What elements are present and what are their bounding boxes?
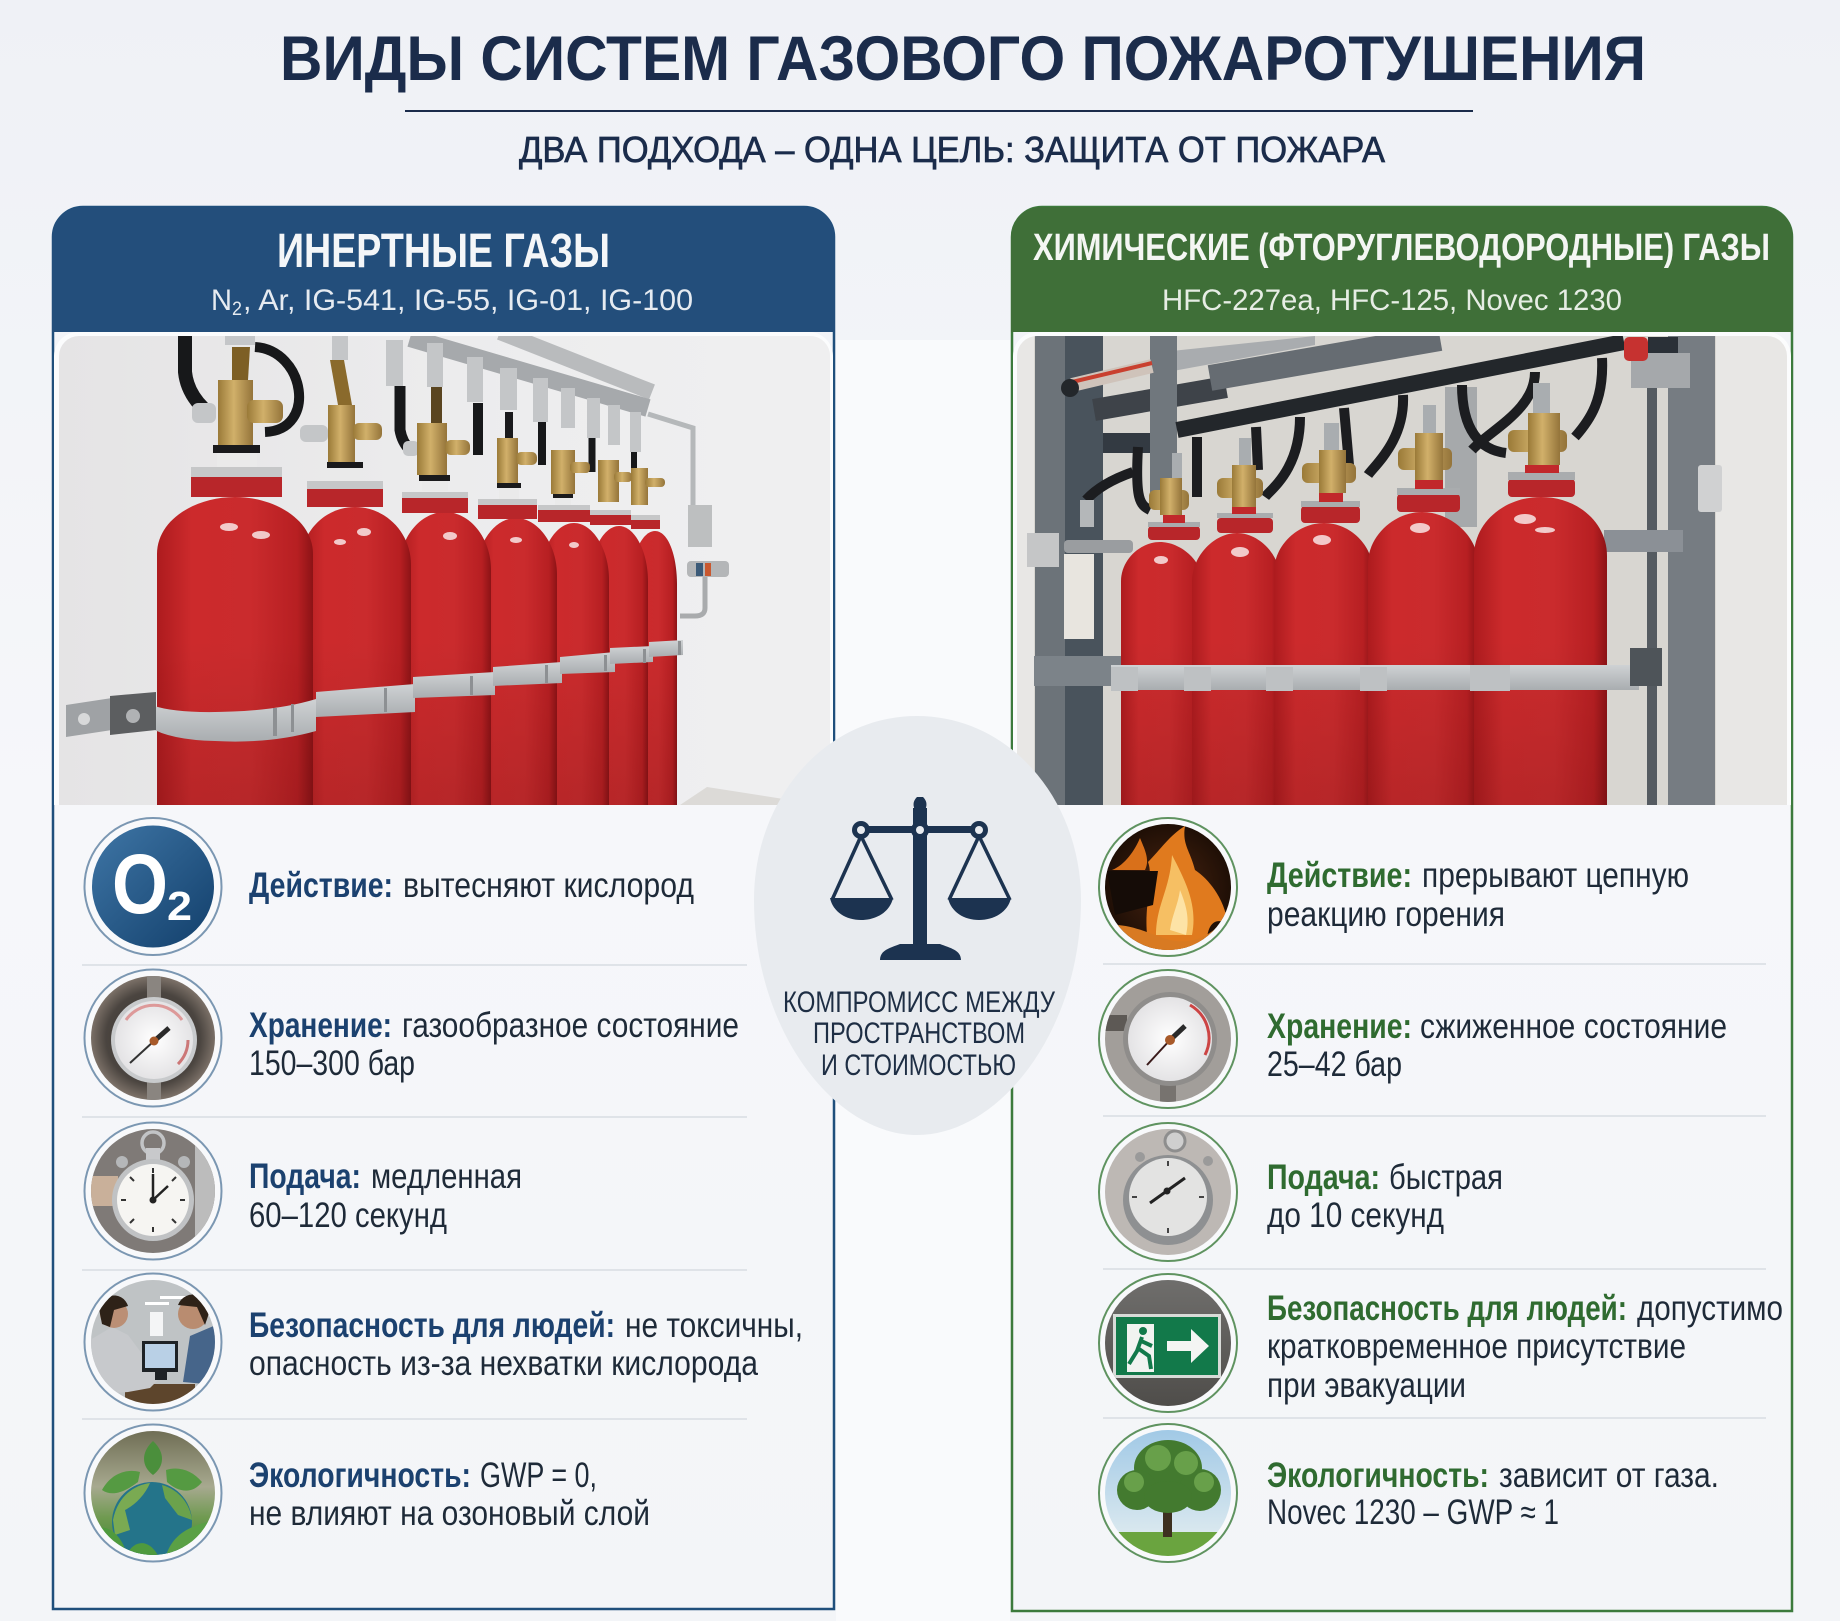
text: storage, chemical: сжиженное состояние: [1420, 1007, 1727, 1046]
heading: inert gases: ИНЕРТНЫЕ ГАЗЫ: [277, 225, 610, 278]
cylinders: [1121, 465, 1607, 805]
icon: O2: O: [112, 837, 168, 931]
text: ecology, inert: Экологичность:: [249, 1456, 471, 1495]
icon: O2: [84, 818, 222, 955]
text: safety, chemical: [1267, 1289, 1783, 1405]
text: safety, inert: Безопасность для людей:: [249, 1306, 615, 1345]
text: ecology, chemical: [1267, 1456, 1719, 1532]
clamp bands: [149, 640, 683, 742]
text: delivery, chemical: Подача:: [1267, 1158, 1380, 1197]
text: storage, chemical: Хранение:: [1267, 1007, 1412, 1046]
icon: stopwatch, inert: [84, 1122, 222, 1260]
text: delivery, chemical: быстрая: [1389, 1158, 1503, 1197]
text: storage, inert: Хранение:: [249, 1006, 392, 1045]
text: delivery, inert: 60–120 секунд: [249, 1196, 447, 1235]
icon: O2: 2: [167, 883, 192, 929]
text: storage, inert: [249, 1006, 739, 1083]
brass valves: [1149, 413, 1567, 515]
text: ecology, chemical: Экологичность:: [1267, 1456, 1489, 1495]
text: delivery, inert: [249, 1157, 522, 1235]
steel frame: [1035, 336, 1065, 805]
text: storage, inert: 150–300 бар: [249, 1044, 415, 1083]
text: action, chemical: прерывают цепную: [1422, 856, 1689, 895]
text: storage, chemical: 25–42 бар: [1267, 1045, 1402, 1084]
text: ecology, inert: не влияют на озоновый слой: [249, 1494, 650, 1533]
text: safety, chemical: при эвакуации: [1267, 1366, 1466, 1405]
icon: pressure gauge, chemical: [1099, 970, 1237, 1108]
text: safety, inert: [249, 1306, 803, 1383]
row separators: [82, 963, 1766, 1420]
text: ecology, inert: GWP = 0,: [480, 1456, 597, 1495]
text: safety, chemical: допустимо: [1637, 1289, 1783, 1328]
text: action, inert: Действие:: [249, 866, 393, 905]
icon: exit sign: [1099, 1274, 1237, 1412]
icon: earth with leaves: [84, 1424, 222, 1562]
text: safety, chemical: Безопасность для людей:: [1267, 1289, 1627, 1328]
callout text: [783, 986, 1056, 1082]
pipes and beam: [1094, 387, 1226, 410]
text: ecology, chemical: зависит от газа.: [1499, 1456, 1719, 1495]
text: ecology, chemical: Novec 1230 – GWP ≈ 1: [1267, 1493, 1559, 1532]
icon: people at console: [84, 1274, 222, 1410]
panel: inert gases: [52, 207, 835, 1609]
text: safety, chemical: кратковременное присутствие: [1267, 1327, 1686, 1366]
clamp band: [1111, 665, 1639, 690]
text: delivery, inert: медленная: [371, 1157, 522, 1196]
panel header: chemical gases: [1011, 207, 1793, 332]
icon: tree: [1099, 1424, 1237, 1562]
silver stems: [192, 336, 641, 456]
callout text: И СТОИМОСТЬЮ: [821, 1049, 1016, 1082]
gas list: inert gases: N: [211, 284, 232, 317]
text: storage, inert: газообразное состояние: [402, 1006, 739, 1045]
icon: stopwatch, chemical: [1099, 1123, 1237, 1261]
gas list: inert gases: 2: [232, 299, 242, 320]
gas list: inert gases: , Ar, IG-541, IG-55, IG-01, IG-100: [243, 284, 693, 317]
cylinders: [157, 467, 677, 805]
wall bracket: [66, 698, 112, 737]
panel: chemical gases: [1011, 207, 1793, 1611]
text: ecology, inert: [249, 1456, 650, 1533]
text: delivery, chemical: до 10 секунд: [1267, 1196, 1444, 1235]
icon: flame: [1099, 818, 1237, 956]
text: safety, inert: опасность из-за нехватки кислорода: [249, 1344, 758, 1383]
brass valves: [218, 347, 665, 505]
text: action, inert: вытесняют кислород: [403, 866, 694, 905]
callout text: КОМПРОМИСС МЕЖДУ: [783, 986, 1056, 1019]
text: action, chemical: реакцию горения: [1267, 895, 1505, 934]
text: delivery, inert: Подача:: [249, 1157, 361, 1196]
text: storage, chemical: [1267, 1007, 1727, 1084]
icon: pressure gauge, inert: [84, 970, 222, 1106]
pipes: [500, 332, 652, 392]
photo: inert gas cylinders: [59, 332, 830, 805]
text: action, chemical: [1267, 856, 1689, 934]
photo: chemical gas cylinders: [1017, 336, 1787, 805]
icon: balance scale: [830, 797, 1011, 960]
center callout: compromise: [754, 716, 1081, 1135]
gas list: chemical gases: HFC-227ea, HFC-125, Novec 1230: [1162, 284, 1622, 317]
subtitle: ДВА ПОДХОДА – ОДНА ЦЕЛЬ: ЗАЩИТА ОТ ПОЖАРА: [519, 129, 1385, 170]
text: action, inert: [249, 866, 694, 905]
text: delivery, chemical: [1267, 1158, 1503, 1235]
hoses: [1086, 358, 1602, 510]
callout text: ПРОСТРАНСТВОМ: [813, 1017, 1025, 1050]
hoses: [185, 336, 634, 480]
title: ВИДЫ СИСТЕМ ГАЗОВОГО ПОЖАРОТУШЕНИЯ: [280, 24, 1646, 94]
text: safety, inert: не токсичны,: [625, 1306, 803, 1345]
text: action, chemical: Действие:: [1267, 856, 1412, 895]
stems: [1172, 383, 1550, 479]
panel header: inert gases: [52, 207, 835, 332]
